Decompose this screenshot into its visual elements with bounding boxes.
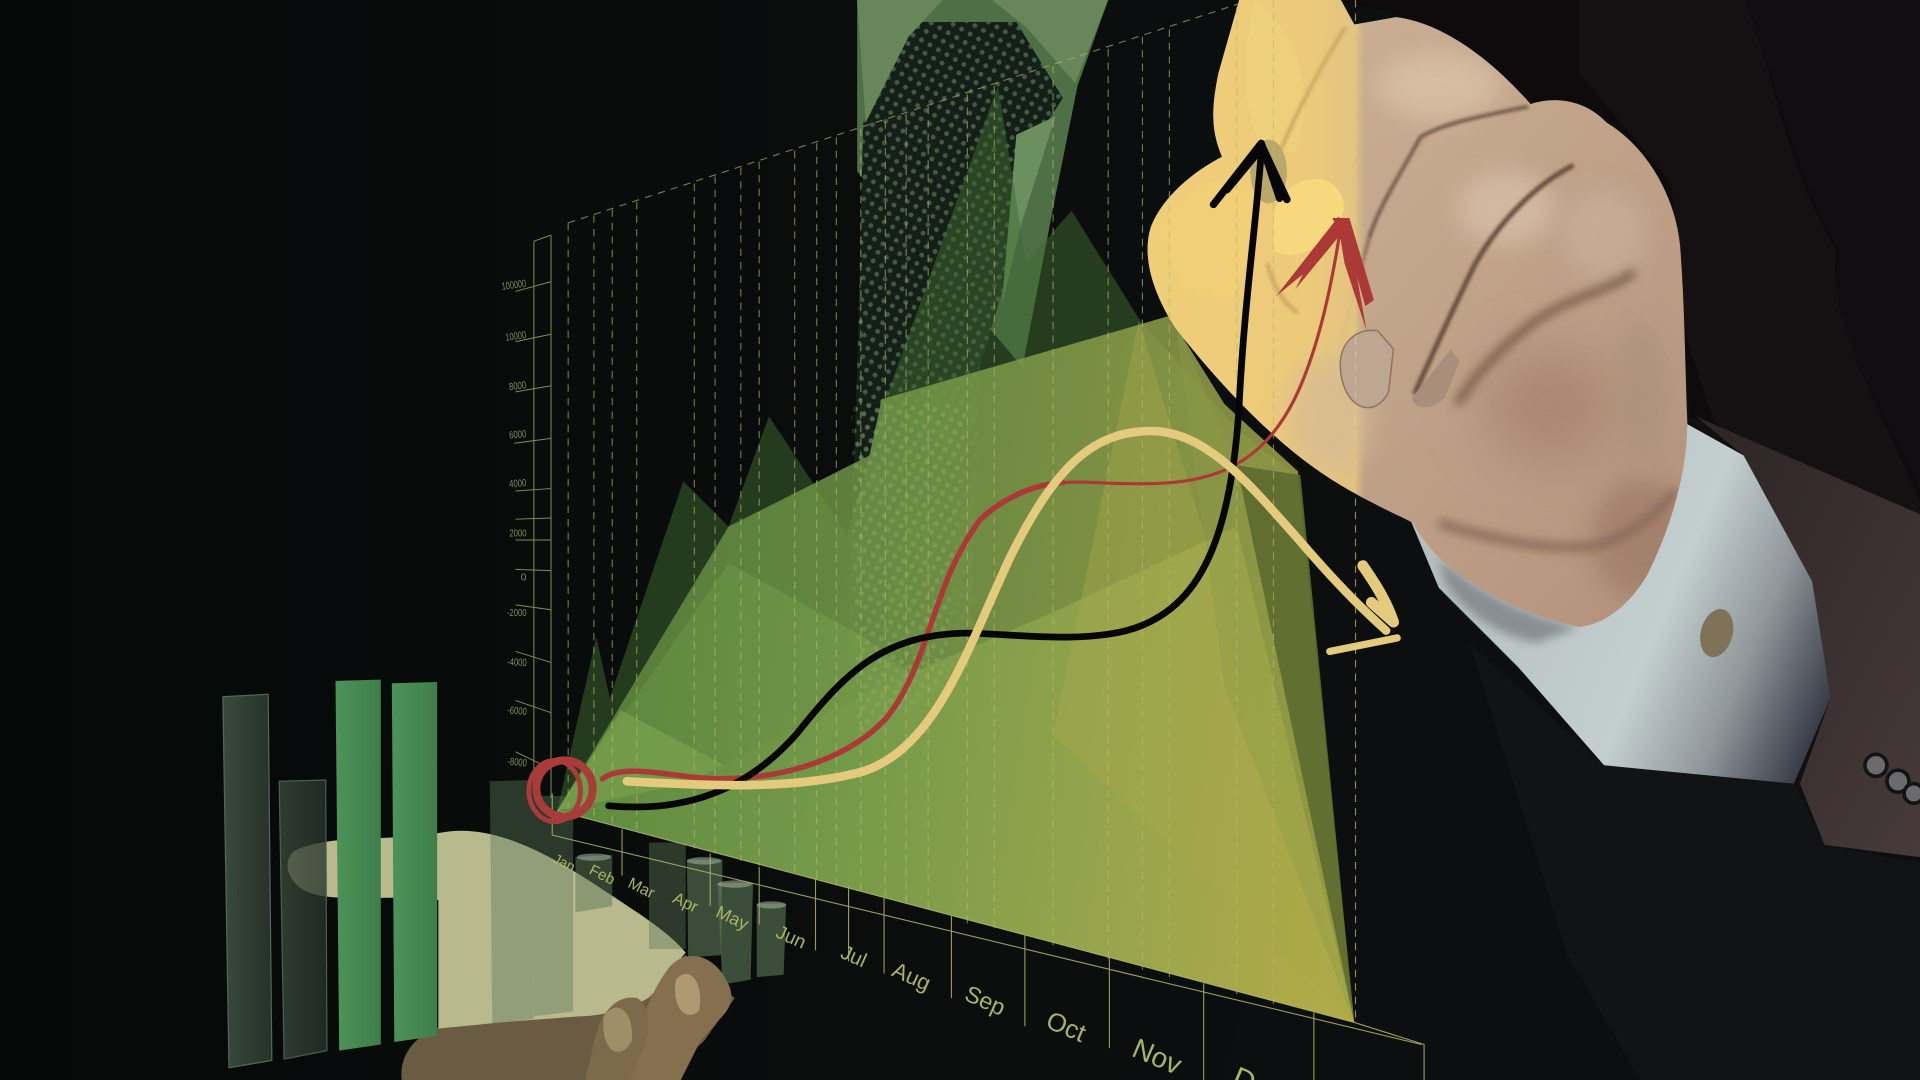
- cuff shadow near wrist: [1439, 557, 1580, 643]
- month labels: [551, 850, 1291, 1080]
- dashed vertical grid lines: [568, 0, 1356, 1022]
- middle fingernail: [1412, 349, 1460, 407]
- finger highlights: [1378, 51, 1500, 120]
- yellow tinted part of hand behind chart: [1148, 0, 1364, 498]
- finger A: [624, 956, 731, 1080]
- dark right-hand wedge: [1237, 465, 1354, 1022]
- y axis labels: -2000: [507, 608, 527, 619]
- y axis labels: 0: [521, 572, 527, 583]
- red start circle: [529, 760, 593, 822]
- palm: [288, 831, 686, 1029]
- y axis labels: 6000: [509, 429, 527, 442]
- fingernail A: [675, 974, 700, 1015]
- index fingertip: [1273, 179, 1344, 255]
- writing hand: [1139, 0, 1690, 637]
- bar chart: [223, 680, 437, 1068]
- y axis labels: 100000: [501, 279, 527, 293]
- month labels: May: [713, 902, 752, 934]
- pen tip: [1250, 140, 1287, 203]
- finger creases: [1369, 107, 1528, 239]
- month labels: Apr: [670, 888, 702, 917]
- bar 3: [336, 680, 381, 1051]
- bar 1: [223, 694, 272, 1068]
- month labels: Mar: [625, 875, 658, 903]
- low foreground area series: [557, 710, 851, 833]
- area chart: [557, 86, 1354, 1022]
- red trend line with arrow: [602, 217, 1374, 779]
- y axis labels: -8000: [507, 757, 528, 770]
- month labels: Oct: [1042, 1007, 1090, 1048]
- narrow yellow peak: [1053, 321, 1354, 1022]
- month labels: Aug: [889, 957, 935, 996]
- shirt checker seen through area: [851, 404, 967, 735]
- y axis labels: 10000: [505, 330, 527, 344]
- bar 4: [392, 682, 437, 1042]
- y axis labels: -4000: [507, 657, 527, 669]
- cream trend line with arrow: [627, 431, 1397, 785]
- sleeve buttons: [1865, 754, 1920, 803]
- bar 2: [279, 780, 327, 1059]
- translucent bars front of hand: [490, 780, 786, 1024]
- y axis labels: 4000: [509, 478, 527, 490]
- index fingernail: [1340, 330, 1393, 408]
- cuff button: [1695, 605, 1738, 661]
- month labels: Feb: [586, 862, 618, 889]
- open hand below the chart: [288, 831, 735, 1080]
- jacket sleeve: [1469, 416, 1920, 1080]
- black trend line with arrow: [609, 143, 1287, 807]
- lighter lower hand under chart: [1287, 355, 1370, 478]
- middle area series: [557, 316, 1354, 1022]
- month labels: Jan: [551, 850, 578, 875]
- upper finger: [1246, 0, 1304, 153]
- month labels: Sep: [961, 980, 1009, 1021]
- month labels: Nov: [1128, 1033, 1186, 1080]
- y axis labels: 2000: [509, 528, 527, 539]
- suit torso: [1224, 0, 1920, 1080]
- y axis labels: [501, 279, 528, 770]
- base fill: [557, 527, 1354, 1022]
- y axis labels: -6000: [507, 705, 527, 718]
- finger B: [585, 997, 648, 1080]
- fingernail B: [603, 1008, 632, 1052]
- shirt cuff: [1411, 419, 1831, 784]
- thumb: [1157, 180, 1255, 300]
- month labels: Jun: [773, 922, 809, 954]
- month axis band: [552, 793, 1424, 1080]
- palm shading: [1482, 349, 1616, 459]
- y axis: [514, 235, 551, 798]
- finger base: [401, 955, 735, 1080]
- back spiky area series: [557, 86, 1354, 1022]
- month labels: Jul: [837, 942, 870, 972]
- y axis labels: 8000: [509, 380, 527, 393]
- shirt collar and tie: [845, 0, 1108, 759]
- front area series: [557, 563, 1354, 1022]
